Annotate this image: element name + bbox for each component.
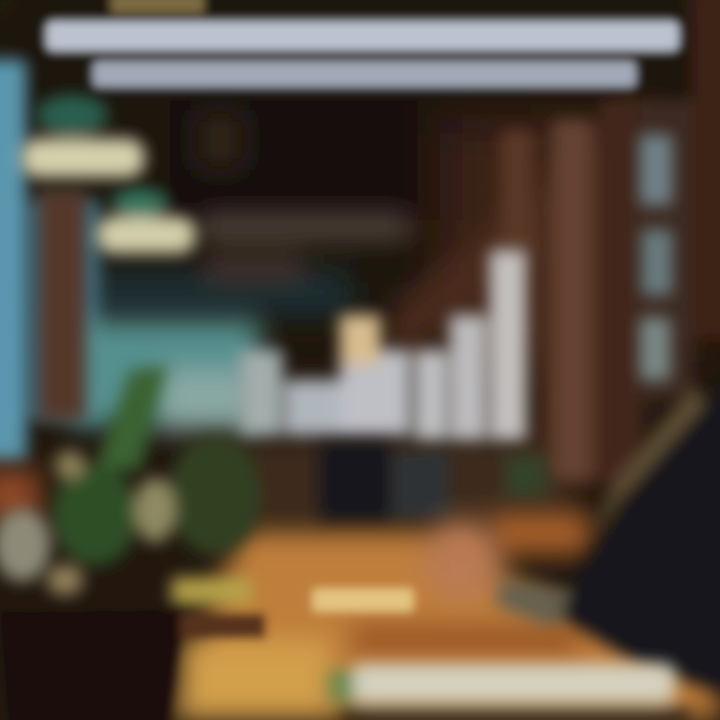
title band: illegible blurred heading [45,0,680,88]
table [0,470,720,720]
plant pot [0,610,265,720]
paper on table [312,588,414,612]
person body [495,370,720,695]
person hand [422,518,502,602]
dark figure in the distance [320,442,547,520]
brown column [38,190,86,420]
ceiling [0,0,720,360]
pendant lamps [22,95,195,253]
left blue window [0,60,100,460]
right wooden columns [390,100,640,480]
plant leaves [0,365,261,604]
plant [0,365,265,720]
lamp: upper [22,95,144,177]
right window panes [640,135,672,380]
person [422,370,720,695]
bright back windows [240,250,526,440]
floor band below windows [240,440,570,520]
lamp: lower [97,189,195,253]
white plate foreground [328,664,690,720]
background mid band [90,110,410,315]
teal window view [70,320,260,430]
